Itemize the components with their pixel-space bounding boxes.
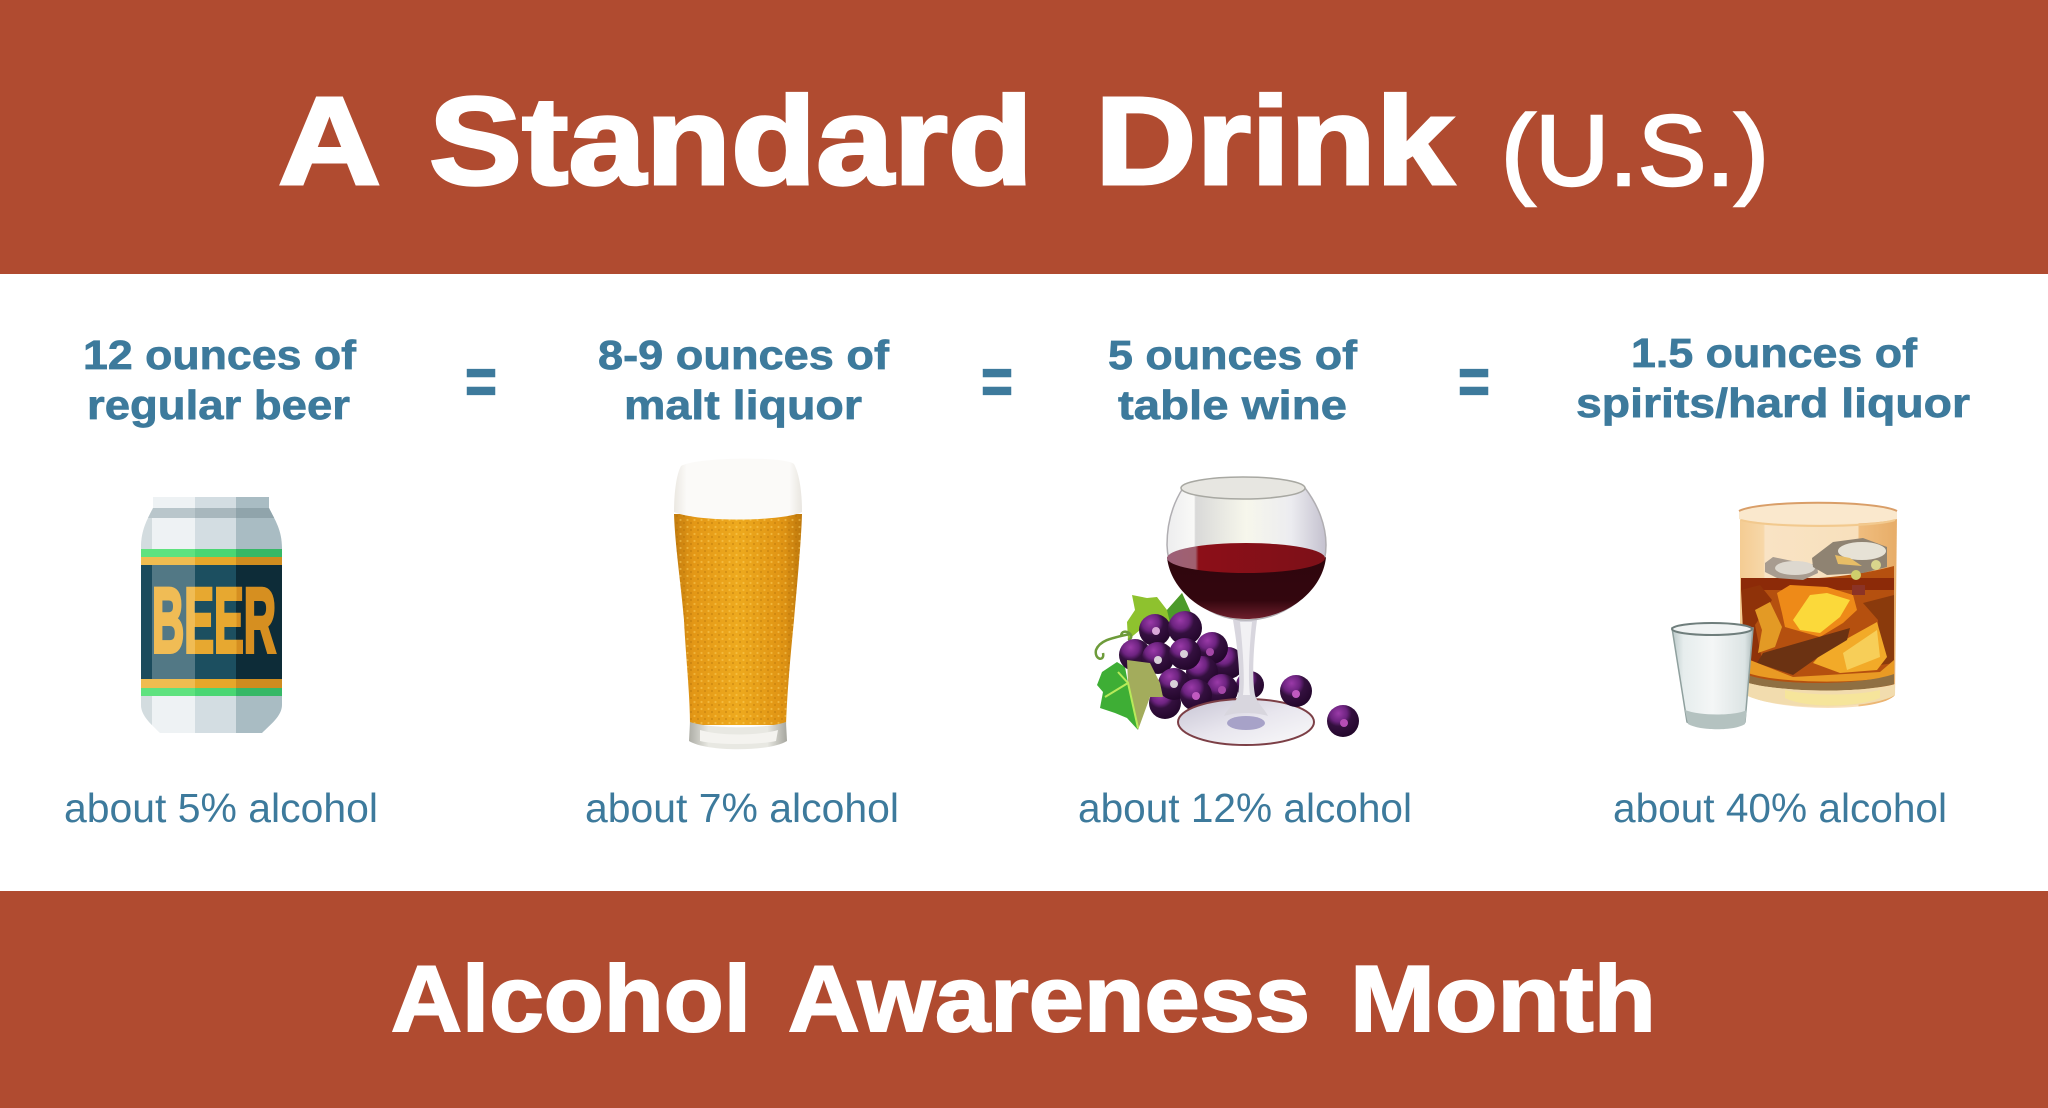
drink label: malt liquor: 8-9 ounces of [598,332,889,378]
drink label: beer [83,332,356,428]
footer title: Alcohol [391,946,751,1051]
drink label: malt liquor [598,332,889,428]
loose grapes [1280,675,1359,737]
alcohol percentage: malt liquor: about 7% alcohol [585,785,899,831]
title: A [278,72,381,211]
icon: malt liquor glass [674,459,802,749]
icon: whiskey tumbler and shot glass [1672,503,1897,729]
drink label: spirits: spirits/hard liquor [1576,380,1970,426]
equals sign 1: = [465,344,497,418]
grape bunch [1119,611,1264,719]
wine glass bowl [1167,488,1326,620]
title: Standard [429,72,1033,211]
drink label: wine: 5 ounces of [1108,332,1357,378]
alcohol percentage: wine: about 12% alcohol [1078,785,1412,831]
alcohol percentage: spirits: about 40% alcohol [1613,785,1947,831]
drink label: beer: regular beer [87,382,350,428]
equals sign 3: = [1458,344,1490,418]
tumbler [1739,503,1897,708]
drink label: malt liquor: malt liquor [624,382,862,428]
wine glass foot [1178,699,1314,745]
ice cubes [1765,538,1887,580]
footer band [0,891,2048,1108]
drink label: wine: table wine [1118,382,1347,428]
drink label: spirits: 1.5 ounces of [1631,330,1917,376]
footer title: Month [1350,946,1656,1051]
equals sign 2: = [981,344,1013,418]
drink label: wine [1108,332,1357,428]
footer title: Awareness [788,946,1310,1051]
wine glass stem [1224,620,1268,716]
drink label: spirits [1576,330,1970,426]
footer title [391,946,1656,1051]
icon: beer can [141,497,282,733]
title suffix: (U.S.) [1501,95,1769,207]
wine [1167,557,1326,619]
icon: wine glass with grapes [1096,477,1359,745]
grape leaves [1096,593,1192,730]
shot glass [1672,623,1753,729]
title [278,72,1455,211]
header band [0,0,2048,274]
title: Drink [1095,72,1455,211]
icon: beer can: BEER [152,570,276,672]
drink label: beer: 12 ounces of [83,332,356,378]
alcohol percentage: beer: about 5% alcohol [64,785,378,831]
